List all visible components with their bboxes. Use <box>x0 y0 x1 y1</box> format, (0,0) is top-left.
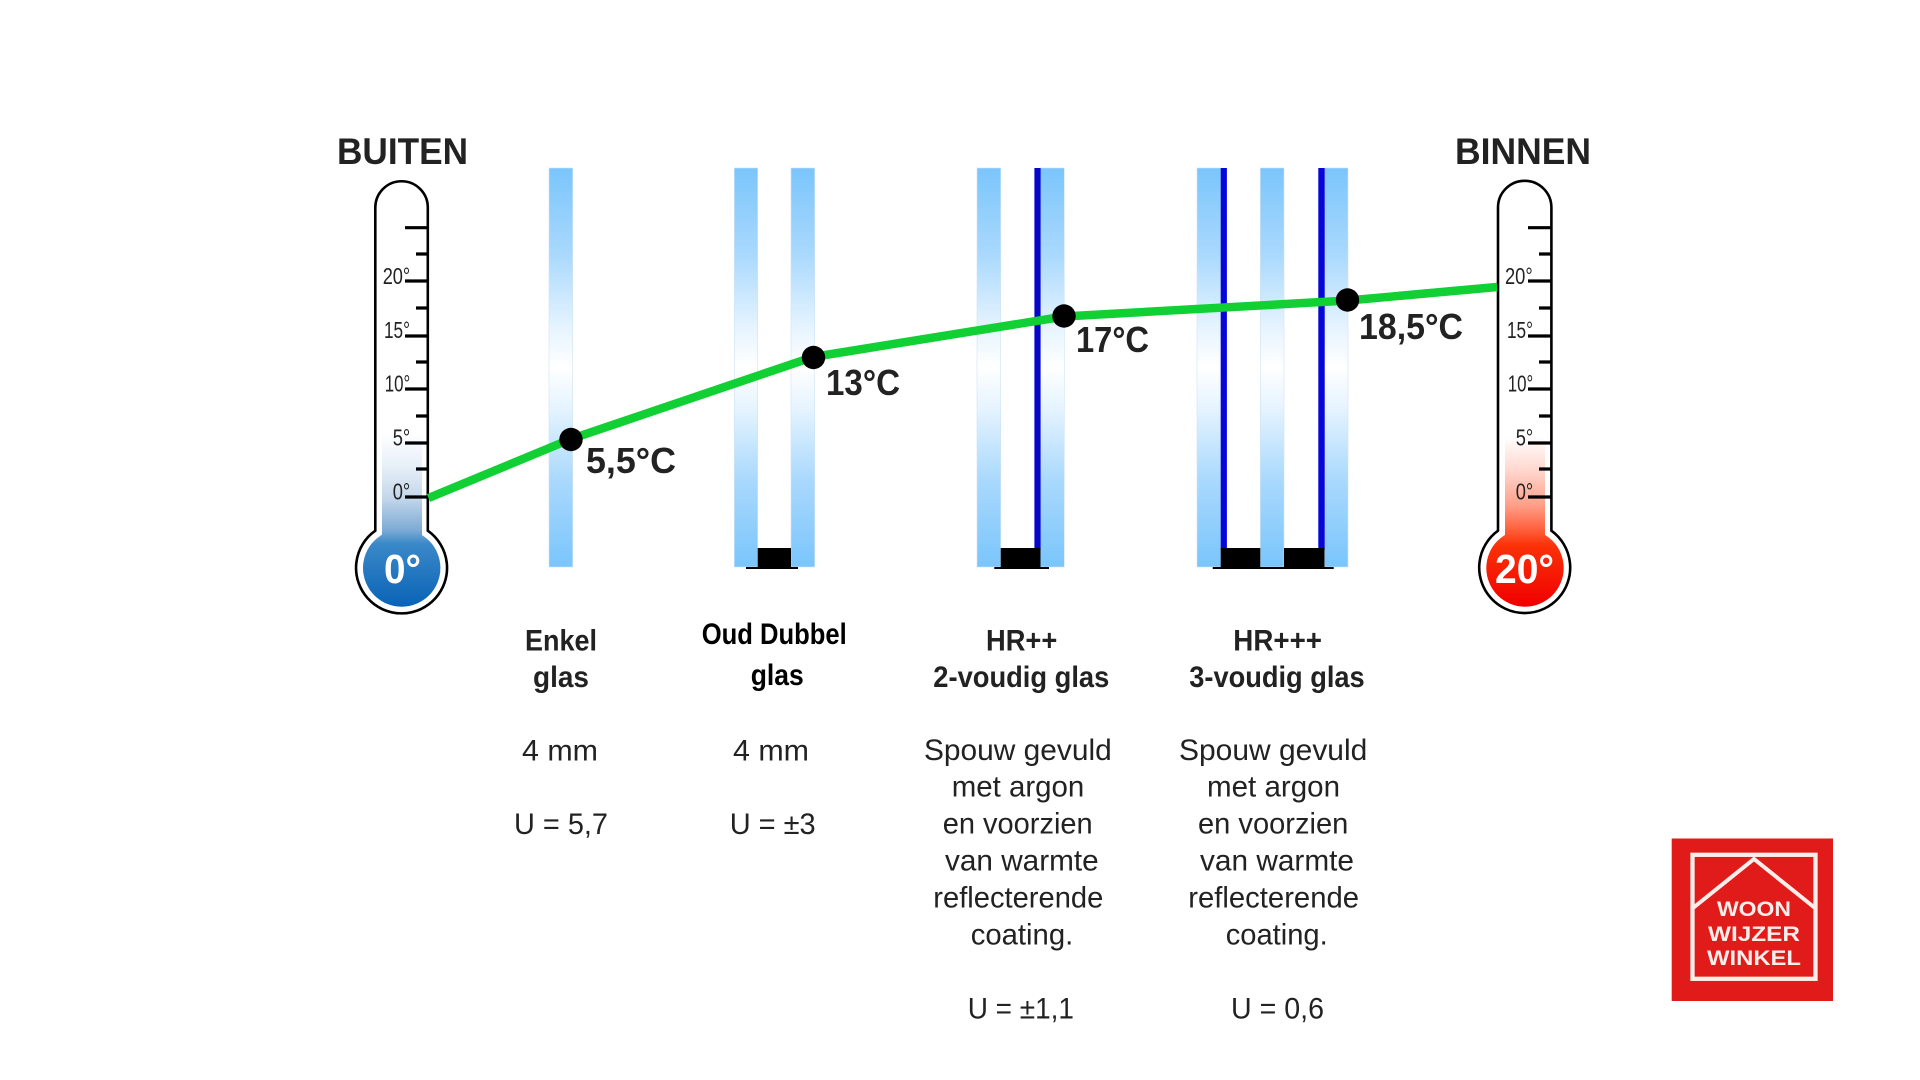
column: enkel glas <box>514 625 608 841</box>
column: enkel glas: U = 5,7 <box>514 808 608 841</box>
logo: Woon Wijzer Winkel: WINKEL <box>1707 947 1801 970</box>
logo: Woon Wijzer Winkel <box>1672 838 1833 1001</box>
column: oud dubbel glas: glas <box>751 659 804 692</box>
thermometer: buiten 0 graden: 0° <box>393 479 410 505</box>
column: HR++ 2-voudig glas: HR++ <box>986 625 1057 658</box>
column: HR++ 2-voudig glas: met argon <box>952 771 1084 804</box>
value: 13°C: 13°C <box>826 362 900 403</box>
thermometer: buiten 0 graden <box>356 181 447 613</box>
column: HR+++ 3-voudig glas <box>1179 625 1367 1025</box>
column: HR++ 2-voudig glas <box>924 625 1112 1025</box>
column: HR++ 2-voudig glas: en voorzien <box>943 808 1093 841</box>
thermometer: buiten 0 graden: 15° <box>384 317 410 343</box>
thermometer: binnen 20 graden: 5° <box>1516 425 1533 451</box>
column: HR+++ 3-voudig glas: van warmte <box>1200 845 1354 878</box>
logo: Woon Wijzer Winkel: WOON <box>1717 898 1791 921</box>
thermometer: binnen 20 graden: 20° <box>1495 546 1554 592</box>
column: HR++ 2-voudig glas: Spouw gevuld <box>924 734 1112 767</box>
glass: oud dubbel glas <box>734 168 815 569</box>
glass: enkel glas <box>549 168 573 567</box>
glass: HR+++ 3-voudig glas <box>1197 168 1348 569</box>
column: oud dubbel glas <box>702 618 847 841</box>
thermometer: buiten 0 graden: 10° <box>385 371 410 397</box>
data points <box>559 288 1359 451</box>
column: HR+++ 3-voudig glas: coating. <box>1226 918 1328 951</box>
logo: Woon Wijzer Winkel: WIJZER <box>1708 923 1800 946</box>
column: HR+++ 3-voudig glas: HR+++ <box>1233 625 1322 658</box>
heading: buiten: BUITEN <box>337 131 468 172</box>
thermometer: binnen 20 graden: 0° <box>1516 479 1533 505</box>
thermometer: binnen 20 graden: 15° <box>1507 317 1533 343</box>
value: 18,5°C: 18,5°C <box>1359 306 1463 347</box>
glass: HR++ 2-voudig glas <box>977 168 1064 569</box>
value: 17°C: 17°C <box>1076 319 1149 360</box>
column: HR+++ 3-voudig glas: en voorzien <box>1198 808 1348 841</box>
column: enkel glas: glas <box>533 661 589 694</box>
column: HR+++ 3-voudig glas: reflecterende <box>1188 881 1359 914</box>
column: HR++ 2-voudig glas: 2-voudig glas <box>933 661 1109 694</box>
thermometer: buiten 0 graden: 0° <box>384 546 421 592</box>
thermometer: binnen 20 graden: 10° <box>1508 371 1533 397</box>
value: 5,5°C: 5,5°C <box>586 440 676 481</box>
thermometer: buiten 0 graden: 20° <box>383 263 410 289</box>
column: enkel glas: Enkel <box>525 625 597 658</box>
column: oud dubbel glas: U = ±3 <box>730 808 816 841</box>
column: oud dubbel glas: Oud Dubbel <box>702 618 847 651</box>
thermometer: buiten 0 graden: 5° <box>393 425 410 451</box>
column: HR++ 2-voudig glas: coating. <box>971 918 1073 951</box>
column: HR+++ 3-voudig glas: Spouw gevuld <box>1179 734 1367 767</box>
column: HR++ 2-voudig glas: U = ±1,1 <box>968 992 1074 1025</box>
heading: binnen: BINNEN <box>1455 131 1591 172</box>
column: HR+++ 3-voudig glas: U = 0,6 <box>1231 992 1324 1025</box>
column: oud dubbel glas: 4 mm <box>733 735 809 768</box>
column: HR+++ 3-voudig glas: met argon <box>1207 771 1340 804</box>
temperature line <box>428 287 1497 498</box>
column: HR++ 2-voudig glas: reflecterende <box>933 881 1103 914</box>
column: HR+++ 3-voudig glas: 3-voudig glas <box>1189 661 1365 694</box>
thermometer: binnen 20 graden <box>1479 181 1570 613</box>
thermometer: binnen 20 graden: 20° <box>1505 263 1533 289</box>
column: HR++ 2-voudig glas: van warmte <box>945 845 1099 878</box>
column: enkel glas: 4 mm <box>522 735 598 768</box>
